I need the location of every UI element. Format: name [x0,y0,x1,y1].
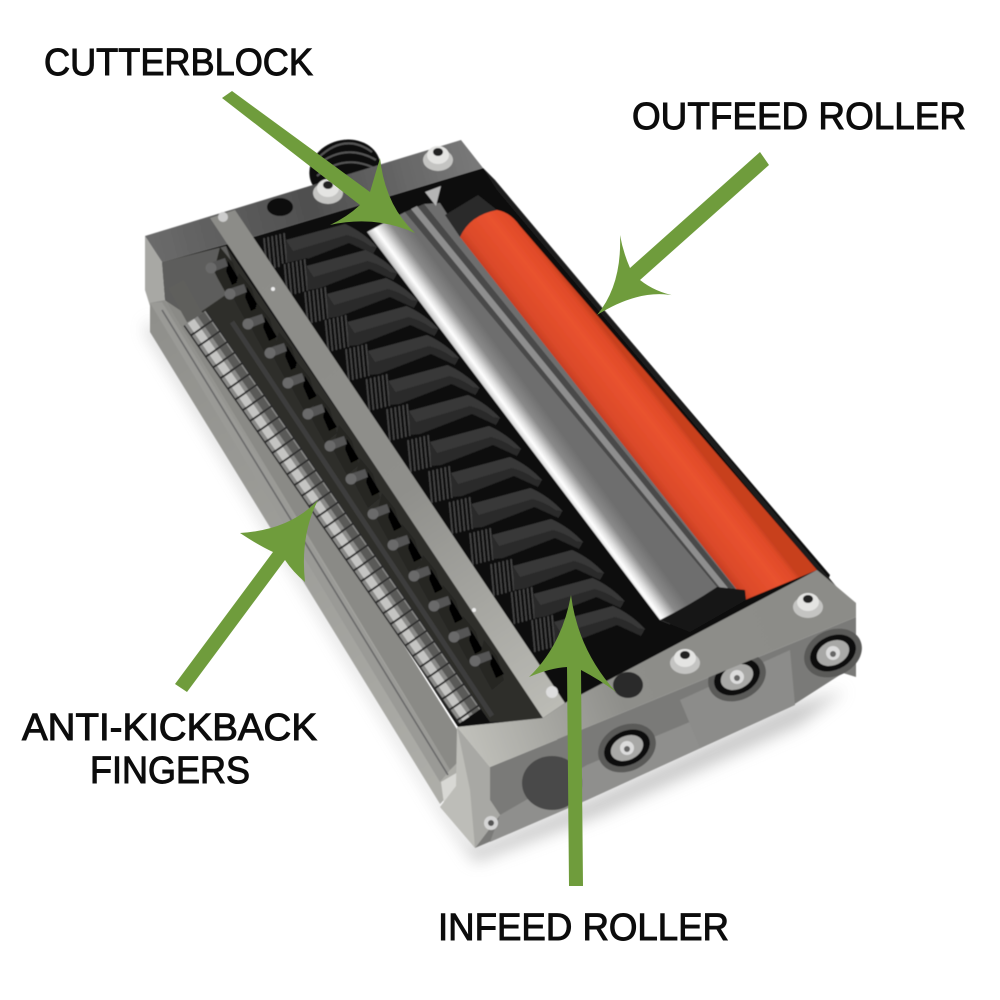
wheel: front left rubber [522,756,582,810]
label: anti-kickback fingers: ANTI-KICKBACK [22,707,317,749]
left end block [145,236,165,306]
left side rail [150,300,470,804]
label: anti-kickback fingers: FINGERS [90,750,250,792]
nut: front right [793,593,823,618]
label: outfeed roller: OUTFEED ROLLER [632,96,966,138]
anti-kickback finger roller [176,284,476,719]
pulley behind frame [302,132,388,208]
nut: back left [313,179,343,204]
thin divider rod [232,322,492,716]
label: anti-kickback fingers [22,707,317,792]
spring-loaded chipbreaker blocks [261,224,645,654]
label: infeed roller: INFEED ROLLER [438,907,729,949]
front frame bar [457,570,856,767]
outfeed roller, red [460,210,817,600]
front left post [440,727,500,848]
label: cutterblock: CUTTERBLOCK [44,42,313,84]
cutter end hub [660,587,746,632]
cutterblock silver cylinder [367,212,717,624]
soft drop shadow under machine [146,320,845,862]
nut: back right [423,146,453,171]
arrow: infeed roller [529,595,616,886]
plug: front dark hole [613,672,643,698]
wheel: middle [700,643,774,711]
front face housing [475,617,870,848]
wheel: front centre [590,714,664,782]
dark gib strips [405,203,746,597]
nut: front middle [670,649,700,674]
machine: cutterhead assembly [145,132,870,848]
plug: back dark hole [267,198,293,216]
inner dark area [162,168,830,740]
pressure strip [210,210,565,718]
finger bolts [206,247,504,690]
right frame bar [483,168,856,610]
arrow: cutterblock [222,91,415,233]
arrow: outfeed roller [597,152,769,315]
shaft end of outfeed roller [445,195,497,237]
arrow: anti-kickback fingers [175,500,318,692]
back frame bar [145,140,483,262]
wheel: right [796,619,870,687]
